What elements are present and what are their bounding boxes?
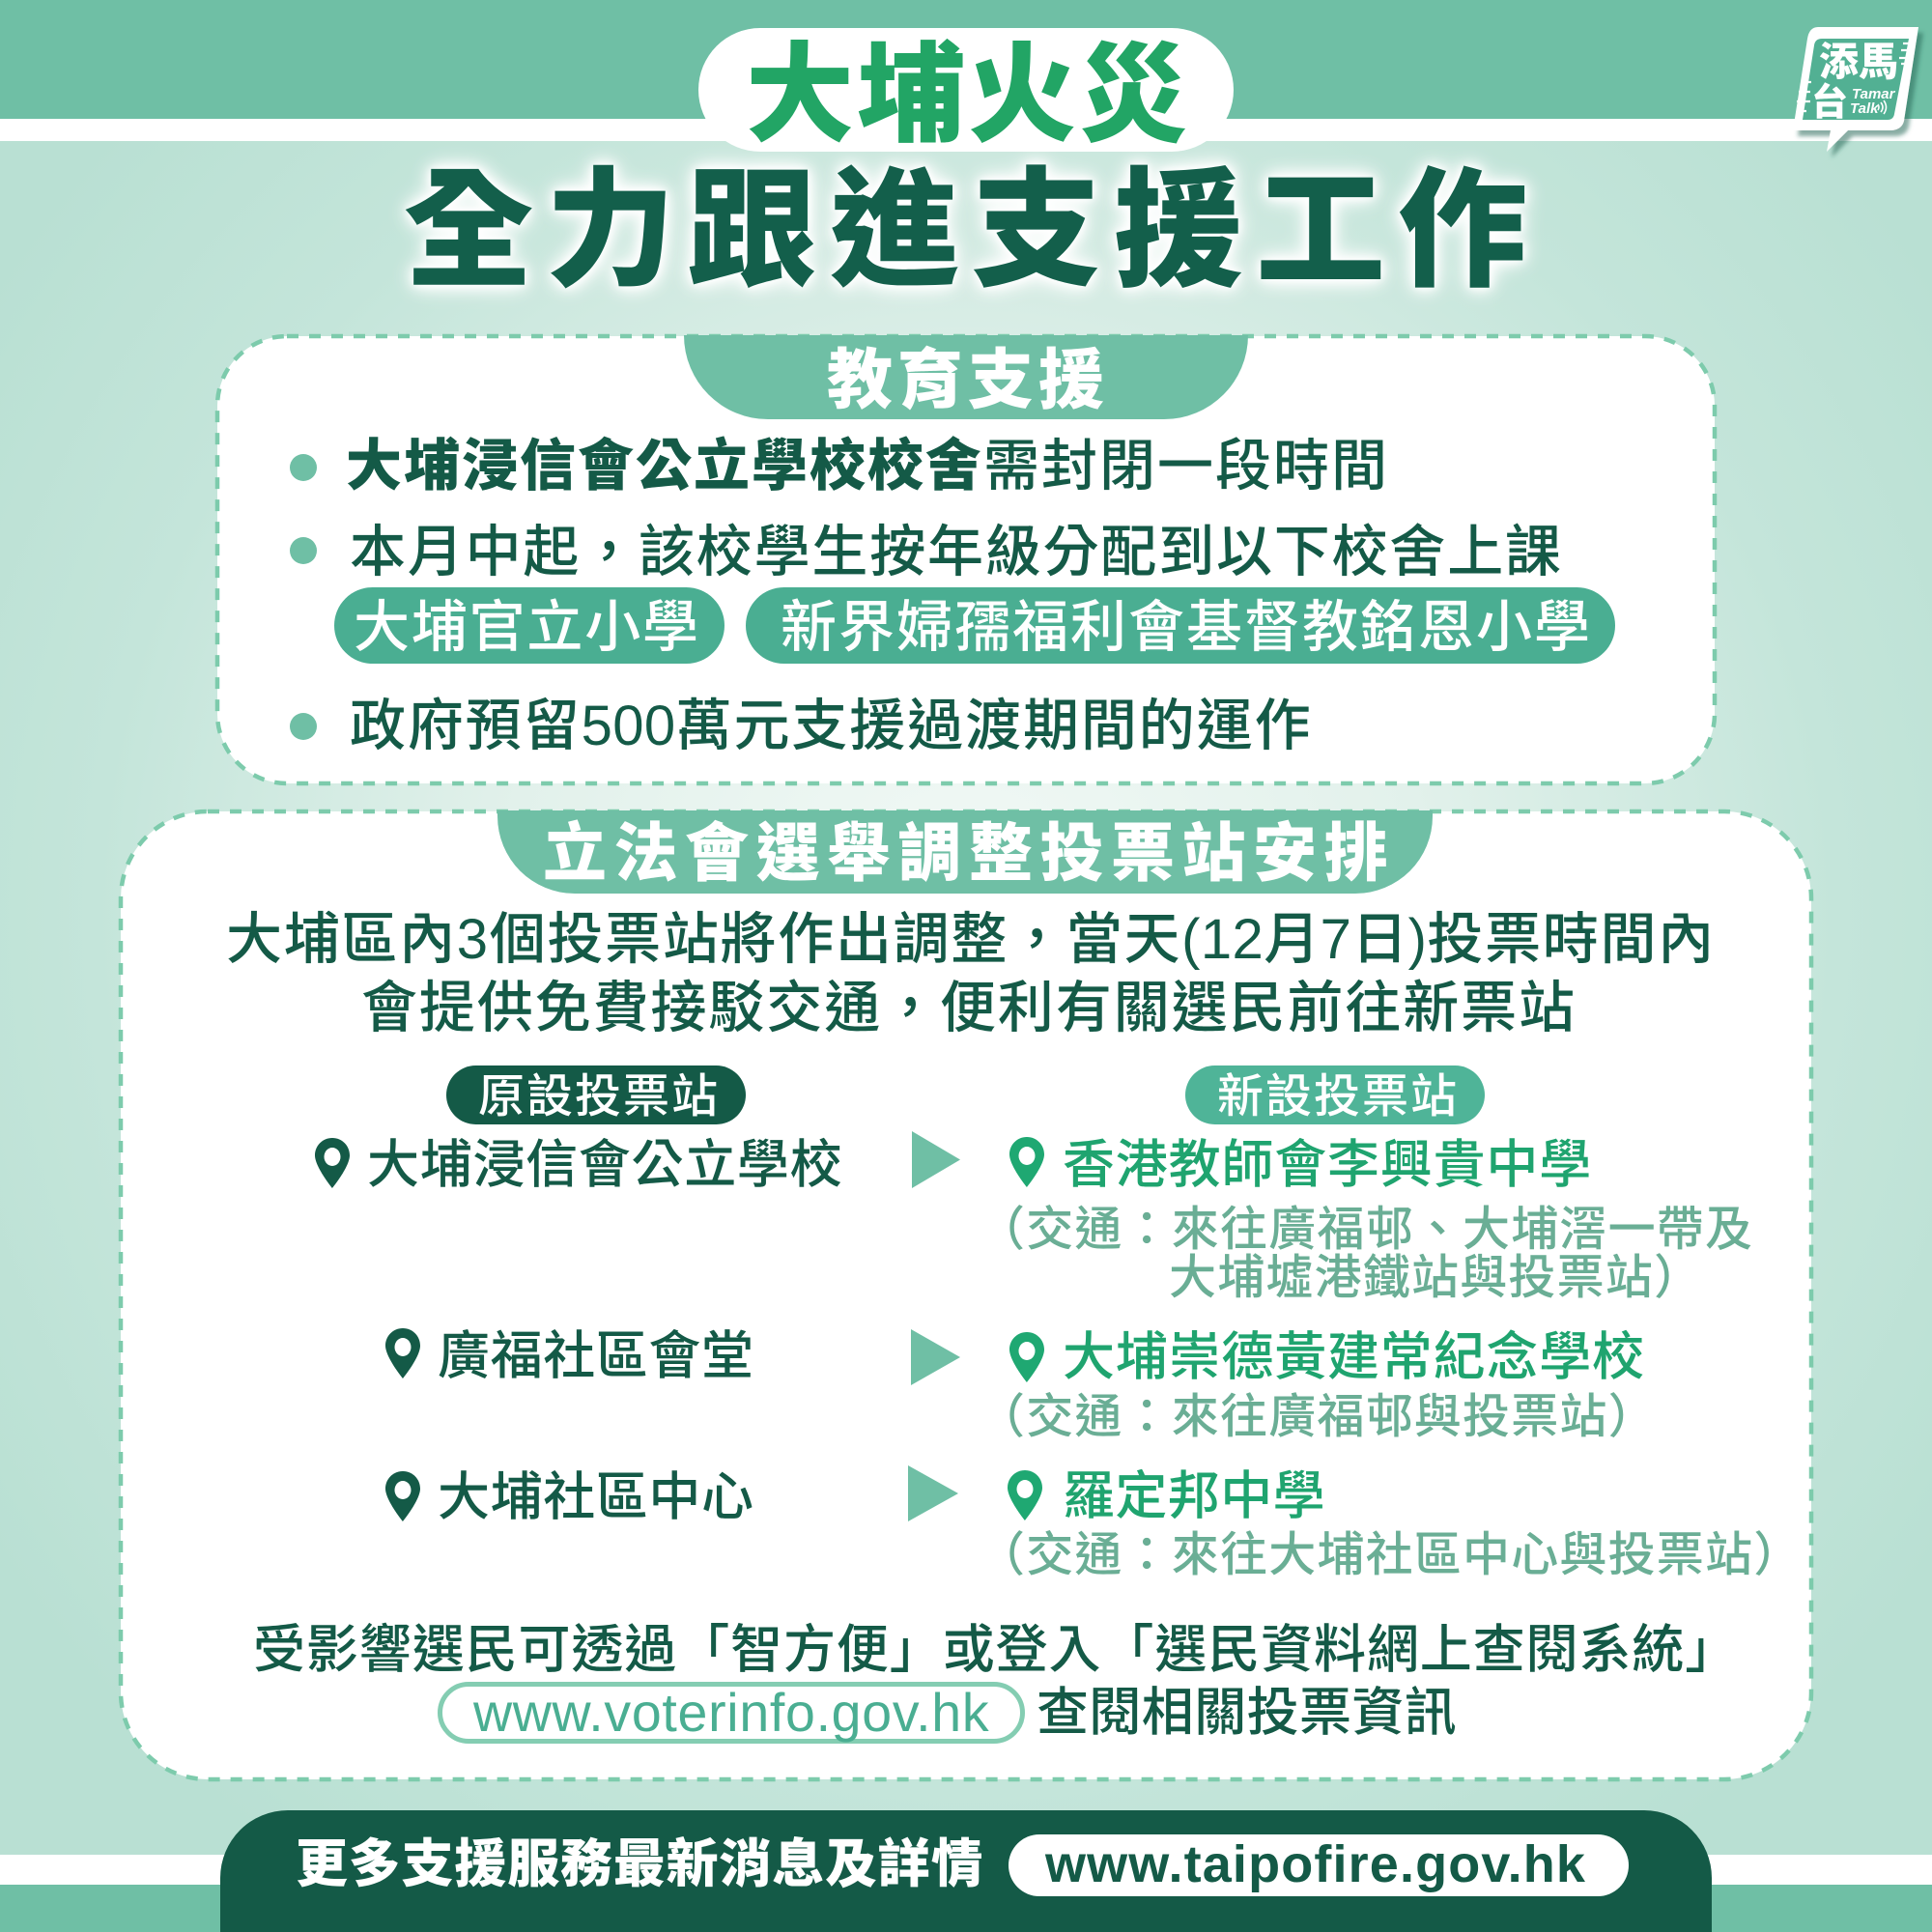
row 3 original: 大埔社區中心 bbox=[438, 1468, 754, 1526]
intro text bbox=[226, 908, 1716, 1039]
footer panel bbox=[220, 1810, 1712, 1932]
bullet 3: 政府預留500萬元支援過渡期間的運作 bbox=[350, 695, 1312, 757]
row 1 transport note bbox=[978, 1204, 1753, 1304]
title pill bbox=[698, 28, 1234, 152]
row 2 original: 廣福社區會堂 bbox=[438, 1327, 754, 1385]
logo: Tamar Talk: 台 bbox=[1811, 72, 1848, 126]
title: line two: 全力跟進支援工作 bbox=[404, 159, 1540, 303]
row 3 transport note: （交通：來往大埔社區中心與投票站） bbox=[978, 1529, 1802, 1581]
footer url pill: www.taipofire.gov.hk bbox=[1045, 1835, 1586, 1893]
arrow 2 bbox=[911, 1329, 960, 1385]
row 1 new: 香港教師會李興貴中學 bbox=[1063, 1136, 1592, 1194]
row 3 new: 羅定邦中學 bbox=[1063, 1467, 1325, 1525]
logo: Tamar Talk: Tamar bbox=[1852, 86, 1896, 102]
closing note: 受影響選民可透過「智方便」或登入「選民資料網上查閱系統」 bbox=[253, 1621, 1738, 1679]
logo: Tamar Talk: Talk bbox=[1850, 100, 1879, 117]
pill: Ming Yan Primary School: 新界婦孺福利會基督教銘恩小學 bbox=[781, 596, 1592, 659]
pill: new stations: 新設投票站 bbox=[1217, 1071, 1459, 1122]
heading: education support: 教育支援 bbox=[827, 344, 1109, 417]
arrow 1 bbox=[912, 1131, 960, 1188]
pill: original stations: 原設投票站 bbox=[478, 1071, 720, 1122]
bullet 1: 大埔浸信會公立學校校舍需封閉一段時間 bbox=[346, 435, 1389, 497]
row 1 transport note: （交通：來往廣福邨、大埔滘一帶及 bbox=[978, 1204, 1753, 1256]
heading: election arrangements: 立法會選舉調整投票站安排 bbox=[543, 817, 1395, 889]
panel: LegCo election polling stations bbox=[118, 810, 1814, 1781]
logo: Tamar Talk bbox=[1795, 27, 1924, 158]
title: line one: 大埔火災 bbox=[746, 35, 1190, 156]
row 2 new: 大埔崇德黃建常紀念學校 bbox=[1063, 1328, 1645, 1386]
bullet 2: 本月中起，該校學生按年級分配到以下校舍上課 bbox=[350, 521, 1563, 583]
closing note line 2: 查閱相關投票資訊 bbox=[1037, 1684, 1457, 1742]
intro text: 會提供免費接駁交通，便利有關選民前往新票站 bbox=[361, 977, 1577, 1039]
tab: election heading bbox=[497, 810, 1433, 894]
pill: Tai Po Government Primary School: 大埔官立小學 bbox=[354, 596, 700, 659]
panel: education support bbox=[214, 334, 1718, 786]
bottom band bbox=[0, 1855, 1932, 1932]
top band bbox=[0, 0, 1932, 141]
intro text: 大埔區內3個投票站將作出調整，當天(12月7日)投票時間內 bbox=[226, 908, 1716, 971]
footer text: 更多支援服務最新消息及詳情 bbox=[296, 1835, 983, 1893]
logo: Tamar Talk: 添馬 bbox=[1819, 29, 1898, 87]
row 2 transport note: （交通：來往廣福邨與投票站） bbox=[978, 1391, 1657, 1443]
arrow 3 bbox=[908, 1465, 958, 1521]
url pill: voterinfo: www.voterinfo.gov.hk bbox=[473, 1683, 989, 1743]
tab: education heading bbox=[684, 335, 1248, 419]
row 1 transport note: 大埔墟港鐵站與投票站） bbox=[1169, 1252, 1702, 1304]
row 1 original: 大埔浸信會公立學校 bbox=[367, 1136, 842, 1194]
